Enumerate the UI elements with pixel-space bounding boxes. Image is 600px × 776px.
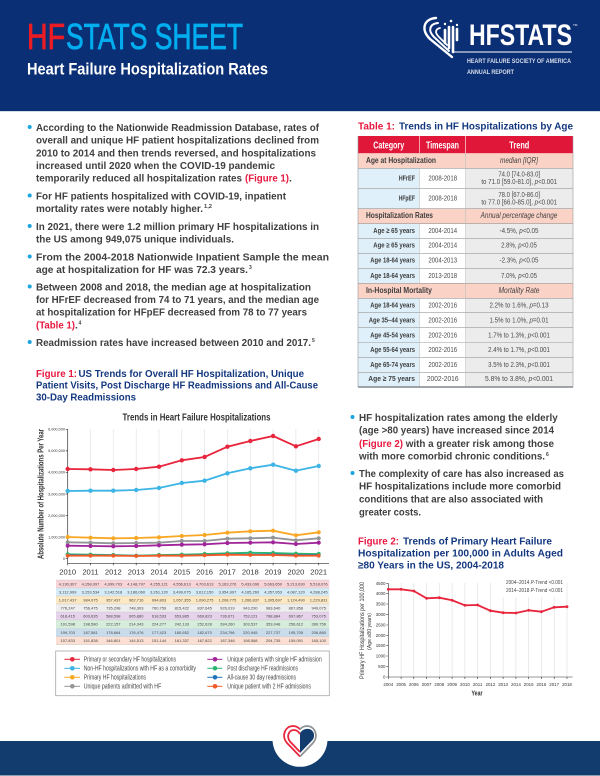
data table under figure 1: 1,305,697 [264, 597, 283, 602]
y axis title: (Age ≥80 years) [367, 613, 373, 650]
x axis labels: 2015 [173, 568, 190, 576]
line chart: trends in heart failure hospitalizations [36, 412, 329, 576]
bullet: complexity of care: greater costs. [359, 507, 421, 518]
data table under figure 1: 187,581 [83, 630, 98, 635]
data table under figure 1: 151,838 [83, 638, 98, 643]
data table under figure 1: 5,518,076 [310, 581, 328, 586]
data table under figure 1: 3,112,999 [59, 589, 77, 594]
data table under figure 1: 204,735 [266, 638, 281, 643]
section: age at hospitalization: HFrEF [399, 174, 415, 183]
y axis labels: 2000 [376, 633, 386, 638]
data table under figure 1: 753,075 [311, 613, 327, 618]
footer band [0, 741, 600, 776]
y axis labels: 1000 [376, 654, 386, 658]
data table under figure 1: 176,476 [129, 630, 144, 635]
section: in-hospital mortality: 2002-2016 [428, 301, 457, 310]
x axis labels: 2010 [59, 568, 76, 576]
legend: figure 1: Unique patients admitted with HF [84, 682, 162, 691]
data table under figure 1: 195,705 [289, 630, 304, 635]
data table under figure 1: 4,357,953 [264, 589, 283, 594]
bullet: readmission database [28, 123, 320, 185]
x axis labels: 2016 [196, 568, 213, 576]
data table under figure 1: 788,884 [266, 613, 281, 618]
section: age at hospitalization: median [IQR] [500, 156, 539, 165]
data table under figure 1: 815,422 [175, 605, 190, 610]
data table under figure 1: 1,208,775 [219, 597, 237, 602]
legend: figure 1: Non-HF hospitalizations with HF as a comorbidity [84, 664, 196, 673]
data table under figure 1: 1,229,831 [310, 597, 328, 602]
section: age at hospitalization: to 77.0 [66.0-85.0], p<0.001 [481, 198, 557, 206]
data table under figure 1: 191,598 [60, 622, 76, 626]
bullet: elderly hospitalization rates: with more comorbid chronic conditions. [358, 452, 545, 463]
table header row: Category [373, 140, 405, 152]
legend: figure 1: Primary HF hospitalizations [84, 673, 146, 682]
section: age at hospitalization [366, 156, 557, 206]
data table under figure 1: 756,475 [83, 605, 98, 610]
section: in-hospital mortality: 1.7% to 1.3%, p<0.001 [488, 330, 550, 339]
section: hospitalization rates: Hospitalization Rates [366, 211, 433, 220]
x axis labels [59, 568, 327, 576]
bullet: readmission database: 2010 to 2014 and then trends reversed, and hospitalizations [36, 148, 316, 159]
y axis labels: 3000 [376, 612, 386, 617]
bullet: complexity of care: HF hospitalizations include more comorbid [359, 482, 561, 493]
legend: figure 1: Primary or secondary HF hospitalizations [84, 655, 176, 664]
logo: HFSTATS: TM [573, 23, 578, 27]
section: hospitalization rates: 7.0%, p<0.05 [501, 271, 537, 280]
section: in-hospital mortality: Age 35–44 years [369, 316, 415, 325]
heading: figure 2: Hospitalization per 100,000 in Adults Aged [358, 549, 563, 560]
bullet: 2021 hospitalizations: In 2021, there were 1.2 million primary HF hospitalizations in [36, 222, 319, 233]
icon: logo heart [424, 18, 458, 57]
data table under figure 1: 3,186,060 [127, 589, 146, 594]
data table under figure 1: 161,337 [175, 638, 190, 643]
data table under figure 1: 957,437 [106, 597, 121, 602]
section: in-hospital mortality: Age 18-64 years [370, 301, 415, 310]
heading: figure 2 [358, 537, 563, 572]
section: age at hospitalization: 2008-2018 [428, 174, 457, 183]
y axis labels: 3500 [376, 602, 386, 606]
bullet: median age: at hospitalization for HFpEF decreased from 78 to 77 years [36, 308, 307, 319]
section: hospitalization rates: Age 18-64 years [370, 256, 415, 265]
x axis labels: 2013 [498, 682, 509, 687]
heading: figure 1: Patient Visits, Post Discharge HF Readmissions and All-Cause [36, 381, 318, 392]
data table under figure 1: 353,048 [266, 622, 281, 626]
x axis labels: 2019 [265, 568, 282, 576]
data table under figure 1: 1,057,355 [173, 597, 191, 602]
section: in-hospital mortality: Mortality Rate [498, 286, 540, 295]
bullet: elderly hospitalization rates: 6 [546, 452, 549, 458]
section: in-hospital mortality: 1.5% to 1.0%, p=0.01 [490, 316, 549, 325]
logo: HFSTATS [424, 18, 578, 76]
data table under figure 1: 5,163,276 [219, 581, 237, 586]
data table under figure 1: 605,880 [129, 613, 144, 618]
x axis labels: 2017 [219, 568, 236, 576]
data table under figure 1: 242,133 [175, 622, 190, 626]
x axis labels: 2011 [82, 568, 99, 576]
legend: figure 1: Unique patients with single HF admission [227, 655, 322, 664]
bullet: 2021 hospitalizations [28, 222, 319, 246]
data table under figure 1: 256,612 [289, 622, 304, 626]
data table under figure 1: 1,017,437 [59, 597, 77, 602]
data table under figure 1: 144,513 [129, 638, 144, 643]
data table under figure 1: 3,499,075 [173, 589, 191, 594]
data table under figure 1: 151,144 [152, 638, 167, 643]
data table under figure 1: 4,148,797 [127, 581, 146, 586]
series: all-cause 30 day readmissions [68, 554, 319, 556]
bullet: COVID-19 mortality: For HF patients hospitalized with COVID-19, inpatient [36, 191, 287, 202]
data table under figure 1: 3,612,150 [196, 589, 214, 594]
data table under figure 1: 962,716 [129, 597, 144, 602]
y axis labels: 1500 [376, 643, 386, 648]
data table under figure 1: 4,087,120 [287, 589, 306, 594]
data table under figure 1: 187,348 [220, 638, 235, 643]
data table under figure 1: 4,288,245 [310, 589, 328, 594]
data table under figure 1: 748,303 [129, 605, 144, 610]
bullet: median age: 4 [78, 320, 82, 326]
bullet: COVID-19 mortality: 1,2 [204, 204, 212, 210]
x axis labels: 2012 [486, 682, 496, 687]
series: unique patients admitted [66, 536, 321, 545]
y axis title: Absolute Number of Hospitalizations Per Year [36, 428, 46, 559]
y axis labels: 0 [383, 674, 386, 680]
table rules [358, 136, 573, 387]
section: hospitalization rates [366, 211, 558, 280]
data table under figure 1: 5,663,650 [264, 581, 283, 586]
section: hospitalization rates: Age ≥ 65 years [373, 241, 415, 250]
trend annotation [506, 580, 563, 594]
bullet: elderly hospitalization rates: (Figure 2) [359, 439, 403, 450]
bullet: elderly hospitalization rates: with a greater risk among those [405, 439, 554, 450]
data table under figure 1: 949,075 [311, 605, 327, 610]
section: in-hospital mortality: Age 55-64 years [370, 345, 415, 354]
table section bands [358, 153, 573, 298]
text block: left bullets [28, 123, 329, 349]
heading: figure 1 [36, 369, 318, 403]
bullet: median age: . [75, 320, 78, 332]
bullet: complexity of care: The complexity of care has also increased as [359, 469, 564, 480]
x axis labels: 2009 [447, 682, 458, 687]
data table under figure 1: 284,260 [220, 622, 235, 626]
section: in-hospital mortality: In-Hospital Mortality [366, 286, 432, 295]
section: age at hospitalization: Age at Hospitalization [366, 156, 436, 165]
x axis labels: 2021 [310, 568, 327, 576]
data table under figure 1: 4,556,613 [173, 581, 191, 586]
data table under figure 1: 1,090,275 [196, 597, 214, 602]
series: unique patients single admission [66, 540, 321, 548]
logo wordmark: HFSTATS [469, 19, 572, 52]
bullet: readmission database: increased until 2020 when the COVID-19 pandemic [36, 161, 275, 172]
section: in-hospital mortality [366, 286, 553, 383]
bullet: readmission database: (Figure 1) [245, 174, 289, 185]
series: unique patient with 2 admissions [66, 553, 321, 558]
data table under figure 1: 3,153,534 [82, 589, 100, 594]
table: trends by age [358, 136, 573, 388]
table header row [358, 136, 573, 153]
data table under figure 1: 222,157 [106, 622, 121, 626]
bullet: 2021 hospitalizations: the US among 949,075 unique individuals. [36, 234, 234, 246]
data table under figure 1: 994,803 [152, 597, 167, 602]
data table under figure 1: 227,737 [266, 630, 281, 635]
data table under figure 1: 224,277 [152, 622, 167, 626]
y axis labels: 4,000,000 [48, 471, 65, 475]
section: hospitalization rates: 2004-2013 [428, 256, 457, 265]
series: non-HF with HF comorbidity [66, 462, 321, 493]
chart title: Trends in Heart Failure Hospitalizations [122, 412, 271, 424]
table header row: Trend [509, 140, 529, 152]
bullet: readmission rates: Readmission rates have increased between 2010 and 2017. [36, 338, 311, 349]
bullet: readmission database: . [289, 174, 292, 185]
x axis labels: 2005 [396, 682, 407, 687]
section: age at hospitalization: HFpEF [399, 194, 415, 203]
y axis labels: 4000 [376, 591, 386, 596]
section: hospitalization rates: Age 18-64 years [370, 271, 415, 280]
x axis labels: 2015 [524, 682, 534, 687]
data table under figure 1: 618,415 [60, 613, 76, 618]
trend annotation: 2004–2014 P-Trend <0.001 [506, 580, 563, 586]
y axis labels: 6,000,000 [48, 428, 65, 432]
series: primary or secondary HF hospitalizations [66, 434, 321, 472]
data table under figure 1: 736,671 [220, 613, 235, 618]
data table under figure 1: 252,628 [197, 622, 213, 626]
data table under figure 1: 984,075 [83, 597, 98, 602]
x axis labels: 2012 [105, 568, 122, 576]
section: in-hospital mortality: Age ≥ 75 years [368, 374, 415, 383]
section: hospitalization rates: 2.8%, p<0.05 [501, 241, 537, 250]
data table under figure 1: 735,298 [106, 605, 121, 610]
bullet: readmission database: According to the Nationwide Readmission Database, rates of [36, 123, 320, 134]
x axis labels: 2008 [434, 682, 445, 687]
data table under figure 1: 3,954,997 [219, 589, 237, 594]
data table under figure 1: 867,858 [289, 605, 304, 610]
section: hospitalization rates: 2004-2014 [428, 226, 457, 235]
section: in-hospital mortality: 2002-2016 [427, 374, 459, 383]
y axis title: Primary HF Hospitalizations per 100,000 [360, 581, 366, 679]
x axis labels: 2006 [409, 682, 419, 687]
x axis labels: 2013 [128, 568, 145, 576]
section: age at hospitalization: 74.0 [74.0-83.0] [498, 170, 540, 178]
section: age at hospitalization: 78.0 [67.0-86.0] [498, 190, 540, 199]
data table under figure 1: 220,945 [243, 630, 258, 635]
series: post discharge readmissions [66, 551, 321, 558]
heading: figure 1: US Trends for Overall HF Hospitalization, Unique [78, 369, 304, 380]
x axis labels: 2016 [537, 682, 547, 687]
data table under figure 1: 837,645 [197, 605, 213, 610]
data table under figure 1 [56, 580, 329, 645]
series: primary HF hospitalizations [66, 529, 321, 540]
heading: figure 2: ≥80 Years in the US, 2004-2018 [358, 561, 504, 572]
data table under figure 1: 178,664 [106, 630, 121, 635]
x axis labels: 2007 [422, 682, 432, 687]
data table under figure 1: 5,213,630 [287, 581, 306, 586]
series: hospitalization rate [387, 588, 568, 614]
data table under figure 1: 4,255,121 [150, 581, 169, 586]
x axis labels: 2018 [562, 682, 572, 687]
data table under figure 1: 234,796 [220, 630, 235, 635]
data table under figure 1: 198,568 [243, 638, 258, 643]
text block: right bullets [350, 413, 564, 518]
section: in-hospital mortality: 2.4% to 1.7%, p<0.001 [488, 345, 550, 354]
data table under figure 1: 214,343 [129, 622, 144, 626]
data table under figure 1: 159,091 [289, 638, 304, 643]
data table under figure 1: 4,130,307 [59, 581, 77, 586]
data table under figure 1: 206,880 [311, 630, 327, 635]
data table under figure 1: 697,867 [289, 613, 304, 618]
x axis labels: 2020 [287, 568, 304, 576]
icon: footer heart badge [272, 712, 328, 767]
y axis labels: 4500 [376, 581, 386, 586]
bullet: readmission database: temporarily reduced all hospitalization rates [36, 174, 242, 185]
data table under figure 1: 180,652 [175, 630, 190, 635]
data table under figure 1: 3,261,120 [150, 589, 169, 594]
bullet: complexity of care: conditions that are also associated with [359, 494, 543, 505]
data table under figure 1: 1,124,490 [287, 597, 306, 602]
y axis labels [48, 428, 65, 561]
x axis labels: 2017 [549, 682, 560, 687]
data table under figure 1: 4,703,613 [196, 581, 214, 586]
data table under figure 1: 199,703 [60, 630, 76, 635]
data table under figure 1: 653,885 [175, 613, 190, 618]
bullet: complexity of care [350, 469, 564, 518]
bullet: mean age: 3 [249, 265, 252, 271]
y axis labels: 0 [63, 557, 65, 561]
line chart: primary HF hospitalization per 100,000 [360, 580, 573, 698]
section: in-hospital mortality: Age 65-74 years [370, 360, 415, 369]
data table under figure 1: 280,756 [311, 622, 327, 626]
data table under figure 1: 926,019 [220, 605, 235, 610]
bullet: elderly hospitalization rates: (age >80 years) have increased since 2014 [359, 426, 554, 437]
x axis labels: 2004 [383, 682, 394, 687]
y axis labels: 2,000,000 [48, 514, 65, 518]
section: hospitalization rates: -2.3%, p<0.05 [500, 256, 539, 265]
x axis labels: 2014 [151, 568, 167, 576]
data table under figure 1: 5,433,096 [241, 581, 260, 586]
section: in-hospital mortality: Age 45-54 years [370, 330, 415, 339]
header band [0, 0, 600, 112]
data table under figure 1: 1,266,837 [241, 597, 260, 602]
legend: figure 1: Unique patient with 2 HF admissions [227, 682, 311, 691]
section: in-hospital mortality: 5.8% to 3.8%, p<0.001 [485, 374, 553, 383]
section: age at hospitalization: to 71.0 [59.0-81.0], p<0.001 [481, 177, 557, 186]
y axis labels: 1,000,000 [48, 535, 65, 539]
trend annotation: 2014–2018 P-Trend <0.001 [506, 588, 563, 594]
y axis labels: 5,000,000 [48, 449, 65, 453]
data table under figure 1: 167,822 [197, 638, 213, 643]
data table under figure 1: 760,759 [152, 605, 167, 610]
data table under figure 1: 618,533 [152, 613, 167, 618]
logo: HFSTATS: ANNUAL REPORT [467, 69, 514, 76]
bullet: mean age: From the 2004-2018 Nationwide Inpatient Sample the mean [36, 252, 329, 263]
x axis labels: 2014 [511, 682, 521, 687]
heading: figure 2: Figure 2: [358, 537, 399, 548]
bullet: median age [28, 282, 319, 332]
x axis labels [383, 682, 572, 687]
logo: HFSTATS: HEART FAILURE SOCIETY OF AMERICA [467, 58, 571, 65]
legend: figure 1: All-cause 30 day readmissions [227, 673, 296, 682]
bullet: readmission database: overall and unique HF patient hospitalizations declined from [36, 136, 319, 147]
title: STATS SHEET [66, 16, 243, 57]
bullet: median age: for HFrEF decreased from 74 to 71 years, and the median age [36, 295, 319, 306]
heading: figure 2: Trends of Primary Heart Failure [403, 537, 552, 548]
legend: figure 1 [56, 651, 329, 696]
data table under figure 1: 182,670 [197, 630, 213, 635]
section: hospitalization rates: -4.5%, p<0.05 [500, 226, 539, 235]
y axis labels: 500 [378, 664, 386, 669]
data table under figure 1: 588,598 [106, 613, 121, 618]
data table under figure 1: 753,121 [243, 613, 258, 618]
section: age at hospitalization: 2008-2018 [428, 194, 457, 203]
bullet: median age: Between 2008 and 2018, the median age at hospitalization [36, 282, 311, 293]
section: hospitalization rates: Age ≥ 65 years [373, 226, 415, 235]
data table under figure 1: 4,099,703 [104, 581, 123, 586]
y axis title [360, 581, 373, 679]
heading: figure 1: Figure 1: [36, 369, 77, 380]
title [27, 16, 243, 57]
x axis labels: 2010 [460, 682, 470, 687]
section: in-hospital mortality: 3.5% to 2.3%, p<0.001 [488, 360, 550, 369]
heading: table 1: Table 1: [358, 122, 395, 133]
data table under figure 1: 177,423 [152, 630, 167, 635]
data table under figure 1: 603,635 [83, 613, 98, 618]
bullet: mean age [28, 252, 329, 276]
section: hospitalization rates: 2013-2018 [428, 271, 457, 280]
table header row: Timespan [426, 140, 459, 152]
section: in-hospital mortality: 2002-2016 [428, 345, 457, 354]
data table under figure 1: 983,640 [266, 605, 281, 610]
bullet: COVID-19 mortality: mortality rates were notably higher. [36, 204, 203, 215]
section: hospitalization rates: Annual percentage change [480, 211, 558, 220]
bullet: elderly hospitalization rates: HF hospitalization rates among the elderly [359, 413, 558, 424]
y axis labels: 3,000,000 [48, 492, 65, 496]
section: in-hospital mortality: 2002-2016 [428, 360, 457, 369]
subtitle: Heart Failure Hospitalization Rates [27, 60, 268, 78]
data table under figure 1: 198,580 [83, 622, 98, 626]
y axis labels [376, 581, 386, 680]
y axis labels: 2500 [376, 622, 386, 628]
data table under figure 1: 157,833 [60, 638, 76, 643]
bullet: median age: (Table 1) [36, 320, 75, 332]
heading: table 1: Trends in HF Hospitalizations by Age [399, 122, 573, 133]
table column fills [358, 136, 573, 387]
bullet: readmission rates: 5 [312, 338, 315, 344]
section: in-hospital mortality: 2.2% to 1.6%, p=0.13 [490, 301, 549, 310]
bullet: COVID-19 mortality [28, 191, 287, 215]
bullet: elderly hospitalization rates [350, 413, 558, 463]
data table under figure 1: 943,290 [243, 605, 258, 610]
section: hospitalization rates: 2004-2014 [428, 241, 457, 250]
data table under figure 1: 776,247 [60, 605, 76, 610]
x axis labels: 2011 [473, 682, 483, 687]
data table under figure 1: 3,142,518 [104, 589, 123, 594]
data table under figure 1: 4,165,260 [241, 589, 260, 594]
x axis title: Year [472, 690, 483, 698]
heading: figure 1: 30-Day Readmissions [36, 392, 136, 403]
data table under figure 1: 669,823 [197, 613, 213, 618]
section: in-hospital mortality: 2002-2016 [428, 330, 457, 339]
data table under figure 1: 4,158,097 [82, 581, 100, 586]
legend: figure 1: Post discharge HF readmissions [227, 664, 298, 673]
data table under figure 1: 165,100 [311, 638, 327, 643]
section: in-hospital mortality: 2002-2016 [428, 316, 457, 325]
bullet: mean age: age at hospitalization for HF was 72.3 years. [36, 265, 248, 276]
x axis labels: 2018 [242, 568, 259, 576]
data table under figure 1: 303,537 [243, 622, 258, 626]
title: HF [27, 16, 65, 57]
data table under figure 1: 146,801 [106, 638, 121, 643]
